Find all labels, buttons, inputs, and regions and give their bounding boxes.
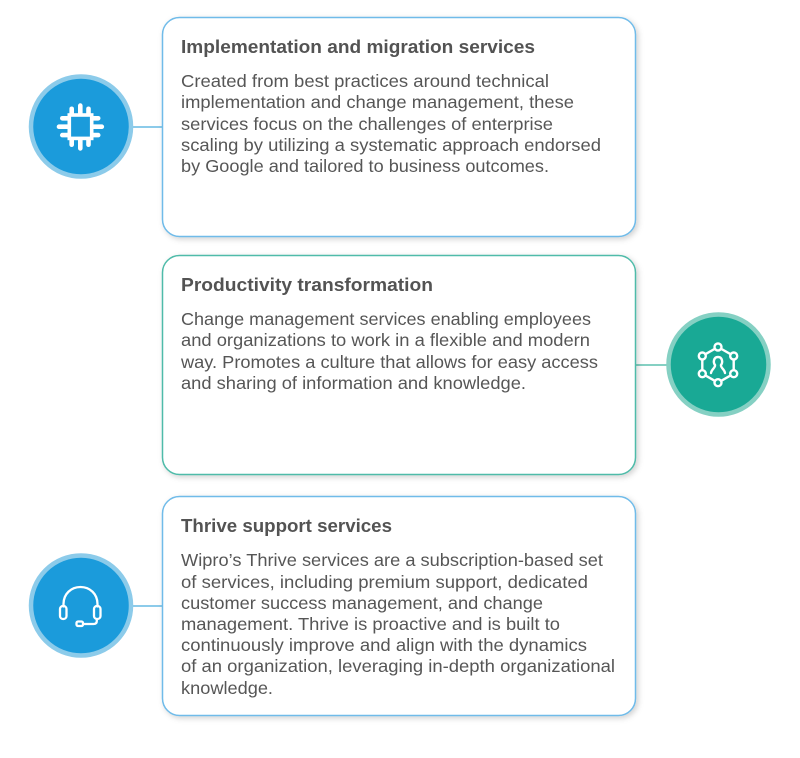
- card 3 heading: Thrive support services: [181, 516, 392, 536]
- card 1 body text: by Google and tailored to business outcomes.: [181, 156, 549, 176]
- panel: thrive support services: [130, 496, 636, 716]
- card 2 body text: [180, 309, 598, 393]
- card 1 heading: Implementation and migration services: [181, 37, 535, 57]
- card 3 body text: knowledge.: [181, 678, 273, 698]
- card 3 body text: management. Thrive is proactive and is built to: [181, 614, 560, 634]
- card 3 body text: customer success management, and change: [181, 593, 543, 613]
- card 3 body text: Wipro’s Thrive services are a subscription-based set: [181, 550, 603, 570]
- card 1 body text: services focus on the challenges of enterprise: [181, 114, 553, 134]
- card 2 box: [162, 256, 636, 474]
- card 3 body text: continuously improve and align with the dynamics: [181, 635, 587, 655]
- card 1 body text: implementation and change management, these: [181, 92, 574, 112]
- panel: implementation and migration services: [130, 18, 636, 236]
- card 1 body text: scaling by utilizing a systematic approach endorsed: [181, 135, 601, 155]
- card 1 body text: Created from best practices around technical: [181, 71, 549, 91]
- card 3 body text: of an organization, leveraging in-depth organizational: [181, 656, 615, 676]
- card 2 heading: Productivity transformation: [181, 275, 433, 295]
- card 1 box: [162, 18, 636, 236]
- panel: productivity transformation: [162, 256, 669, 474]
- card 2 body text: and sharing of information and knowledge.: [181, 373, 526, 393]
- icon: microchip in blue circle: [31, 76, 131, 176]
- card 2 body text: way. Promotes a culture that allows for easy access: [180, 352, 598, 372]
- icon: people network in green circle: [668, 314, 768, 414]
- card 3 box: [162, 496, 636, 716]
- connector: card 1 to icon: [130, 126, 163, 128]
- card 2 body text: Change management services enabling employees: [181, 309, 591, 329]
- card 3 body text: [181, 550, 615, 698]
- card 1 body text: [181, 71, 601, 176]
- connector: card 3 to icon: [130, 605, 163, 607]
- card 3 body text: of services, including premium support, dedicated: [181, 572, 588, 592]
- card 2 body text: and organizations to work in a flexible and modern: [181, 330, 590, 350]
- icon: headset in blue circle: [31, 556, 131, 656]
- connector: card 2 to icon: [635, 364, 669, 366]
